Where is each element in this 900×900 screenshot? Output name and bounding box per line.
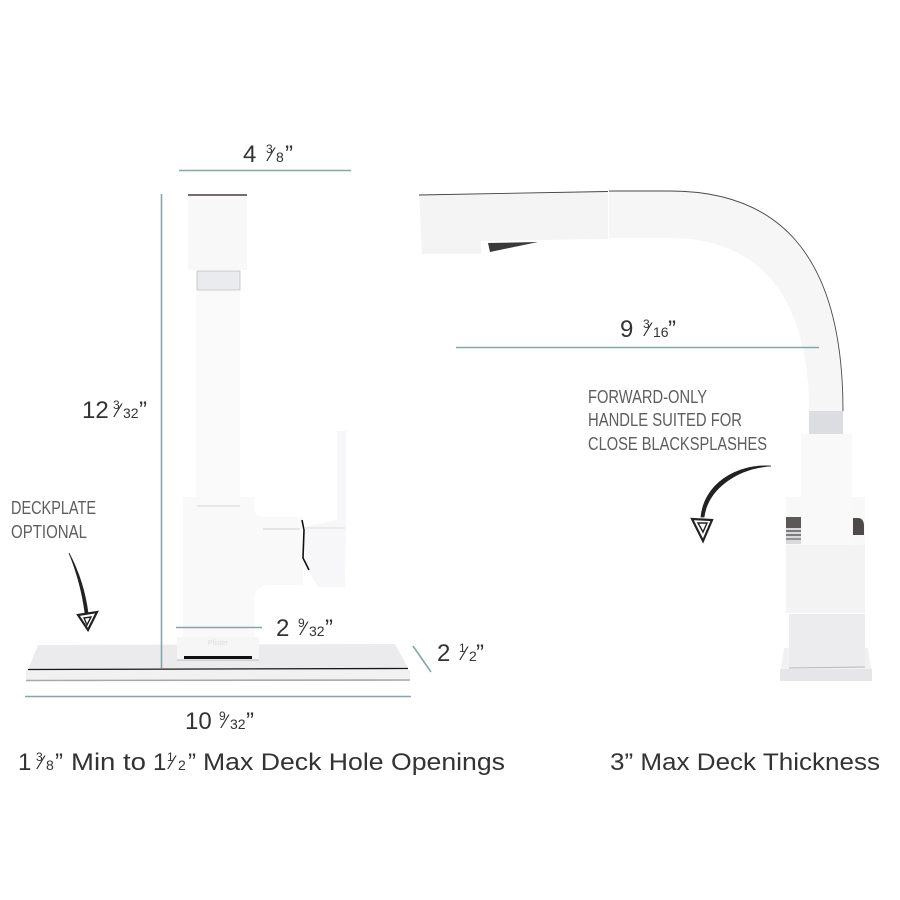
caption: deck hole openings: 1 bbox=[167, 750, 174, 764]
caption: deck hole openings: ⁄ bbox=[36, 753, 46, 774]
dimension: base 2 9/32: 32 bbox=[309, 623, 325, 639]
dimension: plate depth 2 1/2: ⁄ bbox=[459, 644, 469, 665]
note: forward-only handle: CLOSE BLACKSPLASHES bbox=[588, 434, 767, 454]
dimension: reach 9 3/16: 9 bbox=[620, 316, 633, 343]
upper body bbox=[801, 434, 852, 546]
dimension: height 12 3/32: 32 bbox=[123, 405, 139, 421]
lower body bbox=[786, 545, 865, 613]
silver collar bbox=[197, 271, 240, 290]
caption: deck hole openings: ⁄ bbox=[167, 753, 177, 774]
caption: deck thickness: 3” Max Deck Thickness bbox=[610, 749, 880, 776]
dimension: height 12 3/32: ” bbox=[139, 397, 147, 424]
caption: deck hole openings: Min to bbox=[71, 749, 146, 776]
stem bbox=[196, 291, 240, 505]
dimension: plate width 10 9/32: ⁄ bbox=[220, 712, 230, 733]
handle bbox=[302, 431, 346, 587]
base escutcheon bbox=[177, 637, 259, 660]
silver collar bbox=[809, 411, 843, 434]
note: forward-only handle: FORWARD-ONLY bbox=[588, 387, 707, 407]
pull-out spray head bbox=[419, 191, 608, 254]
dimension: plate depth 2 1/2: 1 bbox=[459, 641, 466, 655]
faucet body bbox=[183, 497, 303, 637]
dimension: height 12 3/32: ⁄ bbox=[113, 401, 123, 422]
dimension: base 2 9/32: 2 bbox=[276, 615, 289, 642]
dimension: reach 9 3/16: 3 bbox=[643, 317, 650, 331]
dimension: width 4 3/8: 4 bbox=[243, 141, 256, 168]
dimension: height 12 3/32: 3 bbox=[113, 398, 120, 412]
faucet front view bbox=[26, 195, 410, 681]
note: deckplate optional bbox=[11, 498, 96, 542]
dimension: plate width 10 9/32: 9 bbox=[219, 709, 226, 723]
dimension: base 2 9/32 bbox=[176, 615, 333, 642]
deck plate bbox=[26, 644, 410, 681]
dimension: plate width 10 9/32: 10 bbox=[185, 708, 212, 735]
dimension: base 2 9/32: 9 bbox=[298, 616, 305, 630]
dimension: plate depth 2 1/2: ” bbox=[476, 640, 484, 667]
caption: deck hole openings: 3 bbox=[36, 750, 43, 764]
caption: deck hole openings: Max Deck Hole Openings bbox=[203, 749, 505, 776]
base bbox=[780, 614, 872, 681]
arrow: handle bbox=[692, 466, 771, 541]
curved spout bbox=[609, 191, 843, 411]
dimension: plate depth 2 1/2: 2 bbox=[437, 640, 450, 667]
note: deckplate optional: OPTIONAL bbox=[11, 522, 87, 542]
caption: deck hole openings: 2 bbox=[178, 757, 186, 773]
arrow: deckplate bbox=[69, 553, 97, 630]
dimension: plate width 10 9/32: ” bbox=[246, 708, 254, 735]
base escutcheon: Pfister bbox=[208, 640, 229, 647]
dimension: base 2 9/32: ⁄ bbox=[299, 619, 309, 640]
dimension: width 4 3/8: ⁄ bbox=[266, 145, 276, 166]
dimension: width 4 3/8: 8 bbox=[276, 149, 284, 165]
dimension: width 4 3/8: ” bbox=[285, 141, 293, 168]
faucet side view bbox=[419, 191, 872, 681]
note: deckplate optional: DECKPLATE bbox=[11, 498, 96, 518]
dimension: plate width 10 9/32 bbox=[25, 696, 411, 735]
dimension: reach 9 3/16: ” bbox=[668, 316, 676, 343]
handle seen from side bbox=[786, 497, 865, 546]
caption: deck hole openings: 1 bbox=[153, 749, 166, 776]
dimension: reach 9 3/16 bbox=[456, 316, 819, 348]
dimension: plate width 10 9/32: 32 bbox=[230, 716, 246, 732]
dimension: plate depth 2 1/2 bbox=[413, 640, 484, 672]
note: forward-only handle: HANDLE SUITED FOR bbox=[588, 410, 742, 430]
dimension: base 2 9/32: ” bbox=[325, 615, 333, 642]
dimension: plate depth 2 1/2: 2 bbox=[469, 648, 477, 664]
dimension: reach 9 3/16: ⁄ bbox=[643, 320, 653, 341]
dimension: width 4 3/8 bbox=[179, 141, 351, 170]
note: forward-only handle bbox=[588, 387, 767, 454]
caption: deck hole openings: ” bbox=[55, 749, 63, 776]
top block bbox=[188, 195, 247, 270]
caption: deck hole openings: ” bbox=[188, 749, 196, 776]
caption: deck hole openings: 1 bbox=[18, 749, 31, 776]
caption: deck hole openings: 8 bbox=[46, 757, 54, 773]
dimension: reach 9 3/16: 16 bbox=[653, 324, 669, 340]
dimension: height 12 3/32: 12 bbox=[82, 397, 109, 424]
dimension: height 12 3/32 bbox=[82, 194, 162, 668]
dimension: width 4 3/8: 3 bbox=[266, 142, 273, 156]
